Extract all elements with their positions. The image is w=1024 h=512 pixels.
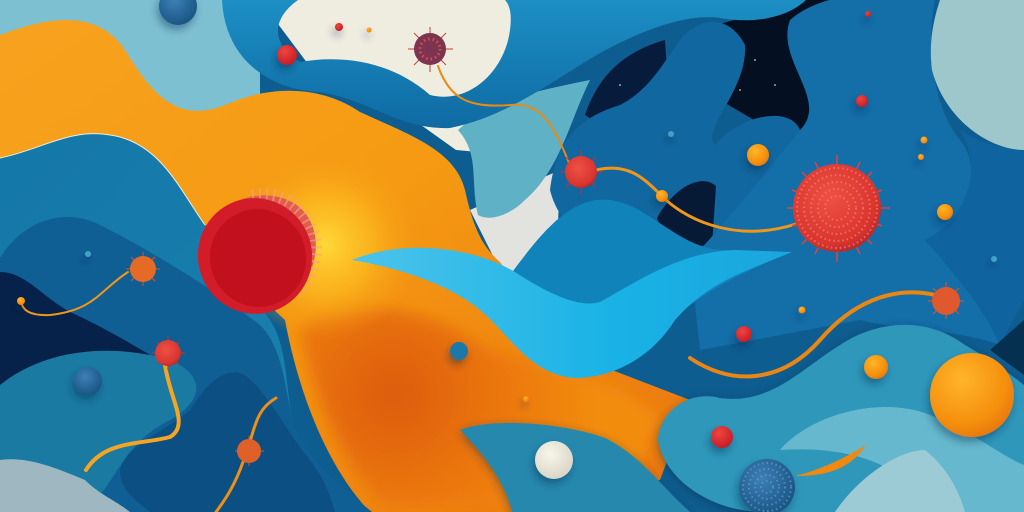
panel: right blue blob	[690, 0, 1000, 350]
panel: lower-centre teal shape	[460, 423, 690, 512]
panel: pale grey column	[470, 170, 560, 280]
icon: textured blue sphere	[743, 463, 791, 511]
panel: teal fold centre	[458, 80, 590, 218]
connector: filaments	[21, 66, 935, 512]
icon: orange spiky cell left	[126, 252, 160, 286]
panel: left blue wave	[0, 134, 372, 512]
panel: cyan ribbon	[352, 248, 792, 378]
panel: top blue ribbon	[222, 0, 806, 128]
icon: red spiky cell mid	[560, 150, 603, 194]
panel: starry dark voids	[585, 0, 830, 150]
panel: top-left pale teal	[0, 0, 260, 135]
panel: pale teal top-right	[931, 0, 1024, 150]
icon: purple spiky cell top	[408, 27, 453, 72]
panel: far right blue	[925, 130, 1024, 345]
icon: large red spiky virus	[787, 155, 890, 262]
panel: orange sweep	[0, 20, 690, 512]
panel: lower-right teal wave	[658, 325, 1024, 512]
panel: dark void under blob	[657, 181, 716, 248]
panel: central cyan ribbon shadow	[510, 200, 790, 341]
icon: red cylinder cell	[182, 182, 328, 330]
icon: orange spiky cell bottom	[235, 436, 264, 466]
panel: central mid-blue blob	[550, 22, 800, 256]
icon: orange spiky cell right	[928, 282, 964, 319]
panel: bottom-right pale corner	[835, 450, 965, 512]
panel: cream void	[260, 0, 530, 152]
panel: orange sliver	[795, 445, 866, 476]
icon: red spiky cell left	[152, 336, 185, 370]
